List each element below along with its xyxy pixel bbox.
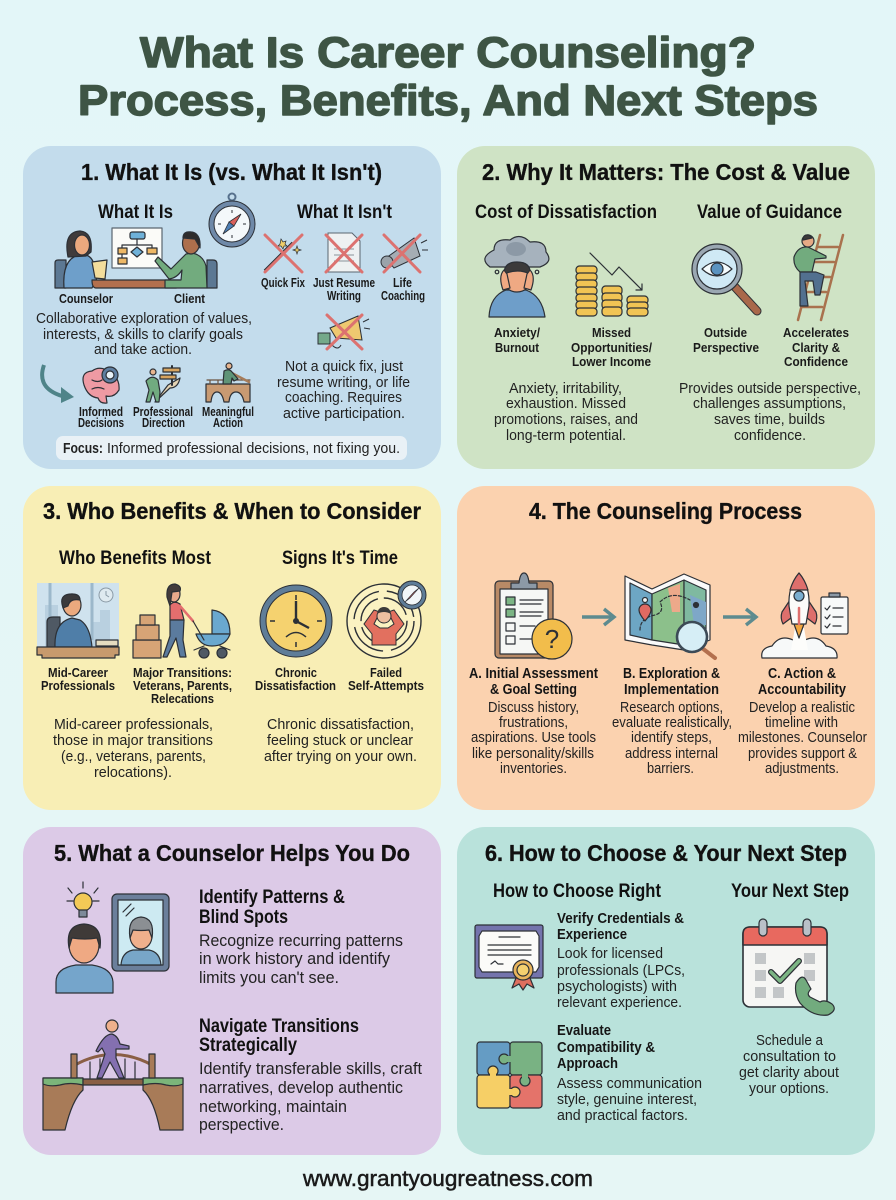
- subheading: signs it's time: Signs It's Time: [282, 548, 398, 569]
- subheading: how to choose right: How to Choose Right: [493, 881, 662, 902]
- labels: chronic dissatisfaction: [255, 666, 336, 693]
- icon: life coaching crossed out: [381, 235, 428, 272]
- text: navigate transitions description: [199, 1059, 422, 1134]
- text: verify credentials heading: Experience: [557, 927, 627, 943]
- subheading: cost of dissatisfaction: Cost of Dissatisfaction: [475, 202, 657, 223]
- text: value description: challenges assumptions,: [693, 395, 846, 412]
- panel: 5. what a counselor helps you do: [23, 827, 441, 1155]
- text: evaluate compatibility heading: [557, 1023, 655, 1072]
- text: signs description: feeling stuck or unclear: [267, 732, 413, 749]
- text: evaluate compatibility heading: Approach: [557, 1056, 618, 1072]
- heading: counseling process: 4. The Counseling Process: [529, 498, 802, 524]
- text: what it isn't description: Not a quick fix, just: [285, 358, 404, 375]
- text: identify patterns heading: [199, 887, 345, 928]
- text: value description: [679, 380, 861, 444]
- heading: step a: [469, 666, 598, 698]
- labels: professional direction: [133, 405, 193, 430]
- text: navigate transitions heading: Strategically: [199, 1035, 297, 1056]
- text: verify credentials heading: [557, 911, 684, 943]
- text: step a description: like personality/skills: [472, 746, 594, 762]
- icon: compass: [209, 194, 255, 247]
- heading: who benefits: 3. Who Benefits & When to Consider: [43, 498, 421, 524]
- text: cost description: long-term potential.: [506, 427, 626, 444]
- label: just resume writing: Just Resume: [313, 276, 375, 290]
- icon: person at signpost: [146, 366, 180, 402]
- text: what it isn't description: resume writing, or life: [277, 374, 410, 391]
- labels: informed decisions: Decisions: [78, 416, 124, 430]
- heading: why it matters: 2. Why It Matters: The Cost & Value: [482, 159, 850, 185]
- text: verify credentials description: relevant experience.: [557, 995, 682, 1011]
- text: evaluate compatibility heading: Compatibility &: [557, 1040, 655, 1056]
- text: navigate transitions heading: [199, 1016, 359, 1056]
- labels: major transitions: Veterans, Parents,: [133, 679, 232, 693]
- labels: anxiety / burnout: Burnout: [495, 341, 540, 355]
- icon: person in maze with compass: [347, 581, 426, 658]
- labels: outside perspective: Outside: [704, 326, 747, 340]
- heading: what it is vs isn't: 1. What It Is (vs. What It Isn't): [81, 159, 382, 185]
- text: signs description: after trying on your own.: [264, 748, 417, 765]
- text: identify patterns description: Recognize recurring patterns: [199, 931, 403, 950]
- text: next step description: get clarity about: [739, 1065, 839, 1081]
- label: quick fix: Quick Fix: [261, 276, 305, 290]
- callout: focus: [56, 436, 407, 460]
- text: cost description: exhaustion. Missed: [506, 395, 626, 412]
- text: step b description: identify steps,: [631, 730, 712, 746]
- labels: professional direction: Direction: [142, 416, 185, 430]
- label: client: Client: [174, 292, 206, 306]
- text: what it isn't description: active participation.: [283, 405, 405, 422]
- subheading: what it is: What It Is: [98, 202, 173, 223]
- text: what it isn't description: coaching. Requires: [285, 389, 402, 406]
- text: evaluate compatibility description: and practical factors.: [557, 1108, 688, 1124]
- text: who benefits description: those in major transitions: [53, 732, 213, 749]
- labels: major transitions: Major Transitions:: [133, 666, 232, 680]
- text: signs description: [264, 716, 417, 765]
- heading: how to choose: 6. How to Choose & Your Next Step: [485, 840, 847, 866]
- footer: website url: www.grantyougreatness.com: [302, 1166, 593, 1191]
- text: navigate transitions heading: Navigate Transitions: [199, 1016, 359, 1037]
- text: step a description: frustrations,: [499, 715, 568, 731]
- labels: missed opportunities: [571, 326, 652, 369]
- icon: counselor and client at a whiteboard: [55, 228, 217, 288]
- labels: missed opportunities: Missed: [592, 326, 631, 340]
- text: identify patterns description: limits you can't see.: [199, 968, 339, 987]
- heading: step c: Accountability: [758, 682, 846, 698]
- text: what it is description: interests, & skills to clarify goals: [43, 326, 243, 343]
- icon: person crossing a bridge: [43, 1020, 183, 1130]
- text: step c description: [738, 700, 867, 777]
- text: step c description: provides support &: [748, 746, 857, 762]
- text: evaluate compatibility heading: Evaluate: [557, 1023, 611, 1039]
- subheading: value of guidance: Value of Guidance: [697, 202, 842, 223]
- labels: anxiety / burnout: Anxiety/: [494, 326, 540, 340]
- labels: missed opportunities: Lower Income: [572, 355, 651, 369]
- text: next step description: [739, 1033, 839, 1097]
- subheading: who benefits most: Who Benefits Most: [59, 548, 212, 569]
- icon: quick fix crossed out: [265, 235, 302, 272]
- text: value description: saves time, builds: [714, 411, 825, 428]
- text: navigate transitions description: networking, maintain: [199, 1097, 347, 1116]
- labels: mid-career professionals: [41, 666, 115, 693]
- labels: major transitions: [133, 666, 232, 706]
- text: step b description: barriers.: [647, 761, 694, 777]
- text: verify credentials description: Look for licensed: [557, 946, 663, 962]
- subheading: what it isn't: What It Isn't: [297, 202, 393, 223]
- heading: step a: A. Initial Assessment: [469, 666, 598, 682]
- text: step c description: adjustments.: [765, 761, 839, 777]
- icon: rocket launch with checklist: [762, 573, 848, 658]
- icon: mid-career professional at a desk: [37, 583, 119, 658]
- icon: eye magnifier: [692, 244, 757, 311]
- text: next step description: your options.: [749, 1081, 829, 1097]
- text: step b description: [612, 700, 732, 777]
- icon: falling coin stacks: [576, 253, 648, 316]
- callout: focus: Focus:: [63, 440, 103, 457]
- labels: missed opportunities: Opportunities/: [571, 341, 652, 355]
- title: What Is Career Counseling?: [140, 29, 756, 77]
- heading: step b: Implementation: [624, 682, 719, 698]
- labels: accelerates clarity: Confidence: [784, 355, 848, 369]
- labels: mid-career professionals: Mid-Career: [48, 666, 108, 680]
- labels: accelerates clarity: Clarity &: [792, 341, 840, 355]
- labels: meaningful action: Meaningful: [202, 405, 254, 419]
- text: step b description: Research options,: [620, 700, 723, 716]
- icon: anxious person under a cloud: [485, 236, 549, 317]
- arrow: step b to c: [723, 609, 756, 625]
- text: step c description: Develop a realistic: [749, 700, 855, 716]
- labels: informed decisions: Informed: [79, 405, 123, 419]
- panel: 3. who benefits: [23, 486, 441, 810]
- panel: 4. counseling process: [457, 486, 875, 810]
- text: next step description: consultation to: [743, 1049, 836, 1065]
- text: step a description: [471, 700, 596, 777]
- icon: boxes, parent and stroller: [133, 584, 230, 658]
- text: who benefits description: Mid-career professionals,: [54, 716, 213, 733]
- heading: step a: & Goal Setting: [490, 682, 577, 698]
- title: [78, 29, 818, 125]
- text: what it is description: [36, 310, 252, 358]
- text: who benefits description: [53, 716, 213, 781]
- text: navigate transitions description: Identify transferable skills, craft: [199, 1059, 422, 1078]
- text: verify credentials description: psychologists) with: [557, 979, 677, 995]
- text: identify patterns heading: Identify Patterns &: [199, 887, 345, 908]
- text: step a description: Discuss history,: [488, 700, 579, 716]
- text: step b description: address internal: [625, 746, 718, 762]
- labels: anxiety / burnout: [494, 326, 540, 355]
- labels: outside perspective: Perspective: [693, 341, 759, 355]
- icon: brain and gear: [83, 367, 119, 403]
- icon: person climbing ladder: [794, 235, 843, 320]
- panel: 1. what it is: [23, 146, 441, 469]
- panel: 6. how to choose and next step: [457, 827, 875, 1155]
- labels: failed self-attempts: Self-Attempts: [348, 679, 424, 693]
- labels: failed self-attempts: [348, 666, 424, 693]
- arrow: curved teal: [42, 365, 74, 403]
- text: verify credentials description: [557, 946, 685, 1011]
- labels: informed decisions: [78, 405, 124, 430]
- text: verify credentials heading: Verify Credentials &: [557, 911, 684, 927]
- text: identify patterns description: in work history and identify: [199, 949, 390, 968]
- icon: puzzle pieces: [477, 1042, 542, 1108]
- labels: professional direction: Professional: [133, 405, 193, 419]
- icon: person, light bulb and mirror: [56, 882, 169, 993]
- text: who benefits description: (e.g., veterans, parents,: [61, 748, 206, 765]
- text: navigate transitions description: perspective.: [199, 1115, 284, 1134]
- labels: chronic dissatisfaction: Dissatisfaction: [255, 679, 336, 693]
- labels: outside perspective: [693, 326, 759, 355]
- label: life coaching: Coaching: [381, 289, 425, 303]
- icon: clipboard with question mark: ?: [545, 624, 559, 654]
- label: just resume writing: [313, 276, 375, 303]
- text: value description: confidence.: [734, 427, 806, 444]
- icon: certificate: [475, 925, 543, 990]
- icon: clipboard with question mark: [495, 573, 572, 659]
- text: step c description: milestones. Counselor: [738, 730, 867, 746]
- text: signs description: Chronic dissatisfaction,: [267, 716, 414, 733]
- heading: step b: [623, 666, 720, 698]
- label: counselor: Counselor: [59, 292, 113, 306]
- text: cost description: [494, 380, 638, 444]
- text: step b description: evaluate realistically,: [612, 715, 732, 731]
- icon: sad clock: [260, 585, 332, 657]
- text: what it is description: and take action.: [94, 341, 192, 358]
- heading: step b: B. Exploration &: [623, 666, 720, 682]
- heading: step c: C. Action &: [768, 666, 836, 682]
- icon: resume crossed out: [326, 233, 362, 272]
- text: navigate transitions description: narratives, develop authentic: [199, 1078, 403, 1097]
- text: value description: Provides outside perspective,: [679, 380, 861, 397]
- text: identify patterns heading: Blind Spots: [199, 907, 288, 928]
- labels: chronic dissatisfaction: Chronic: [275, 666, 317, 680]
- label: life coaching: Life: [393, 276, 412, 290]
- text: identify patterns description: [199, 931, 403, 987]
- text: evaluate compatibility description: Assess communication: [557, 1076, 702, 1092]
- labels: meaningful action: Action: [213, 416, 243, 430]
- text: step a description: aspirations. Use tools: [471, 730, 596, 746]
- icon: person on a bridge: [206, 363, 250, 402]
- labels: accelerates clarity: [783, 326, 849, 369]
- text: what it is description: Collaborative exploration of values,: [36, 310, 252, 327]
- labels: failed self-attempts: Failed: [370, 666, 402, 680]
- labels: major transitions: Relecations: [151, 692, 214, 706]
- text: what it isn't description: [277, 358, 410, 422]
- callout: focus: Informed professional decisions, not fixing you.: [107, 440, 400, 457]
- labels: mid-career professionals: Professionals: [41, 679, 115, 693]
- text: cost description: promotions, raises, and: [494, 411, 638, 428]
- icon: map with magnifier: [625, 574, 715, 658]
- text: who benefits description: relocations).: [94, 764, 172, 781]
- heading: what a counselor helps you do: 5. What a Counselor Helps You Do: [54, 840, 410, 866]
- label: life coaching: [381, 276, 425, 303]
- title: Process, Benefits, And Next Steps: [78, 77, 818, 125]
- text: step a description: inventories.: [500, 761, 567, 777]
- text: evaluate compatibility description: style, genuine interest,: [557, 1092, 697, 1108]
- text: cost description: Anxiety, irritability,: [509, 380, 622, 397]
- text: step c description: timeline with: [765, 715, 838, 731]
- labels: accelerates clarity: Accelerates: [783, 326, 849, 340]
- label: just resume writing: Writing: [327, 289, 361, 303]
- icon: calendar with check and phone: [743, 919, 834, 1015]
- text: verify credentials description: professionals (LPCs,: [557, 963, 685, 979]
- subheading: your next step: Your Next Step: [731, 881, 849, 902]
- icon: megaphone crossed out: [318, 315, 370, 349]
- text: next step description: Schedule a: [756, 1033, 824, 1049]
- panel: 2. why it matters: [457, 146, 875, 469]
- text: evaluate compatibility description: [557, 1076, 702, 1124]
- arrow: step a to b: [582, 609, 614, 625]
- labels: meaningful action: [202, 405, 254, 430]
- heading: step c: [758, 666, 846, 698]
